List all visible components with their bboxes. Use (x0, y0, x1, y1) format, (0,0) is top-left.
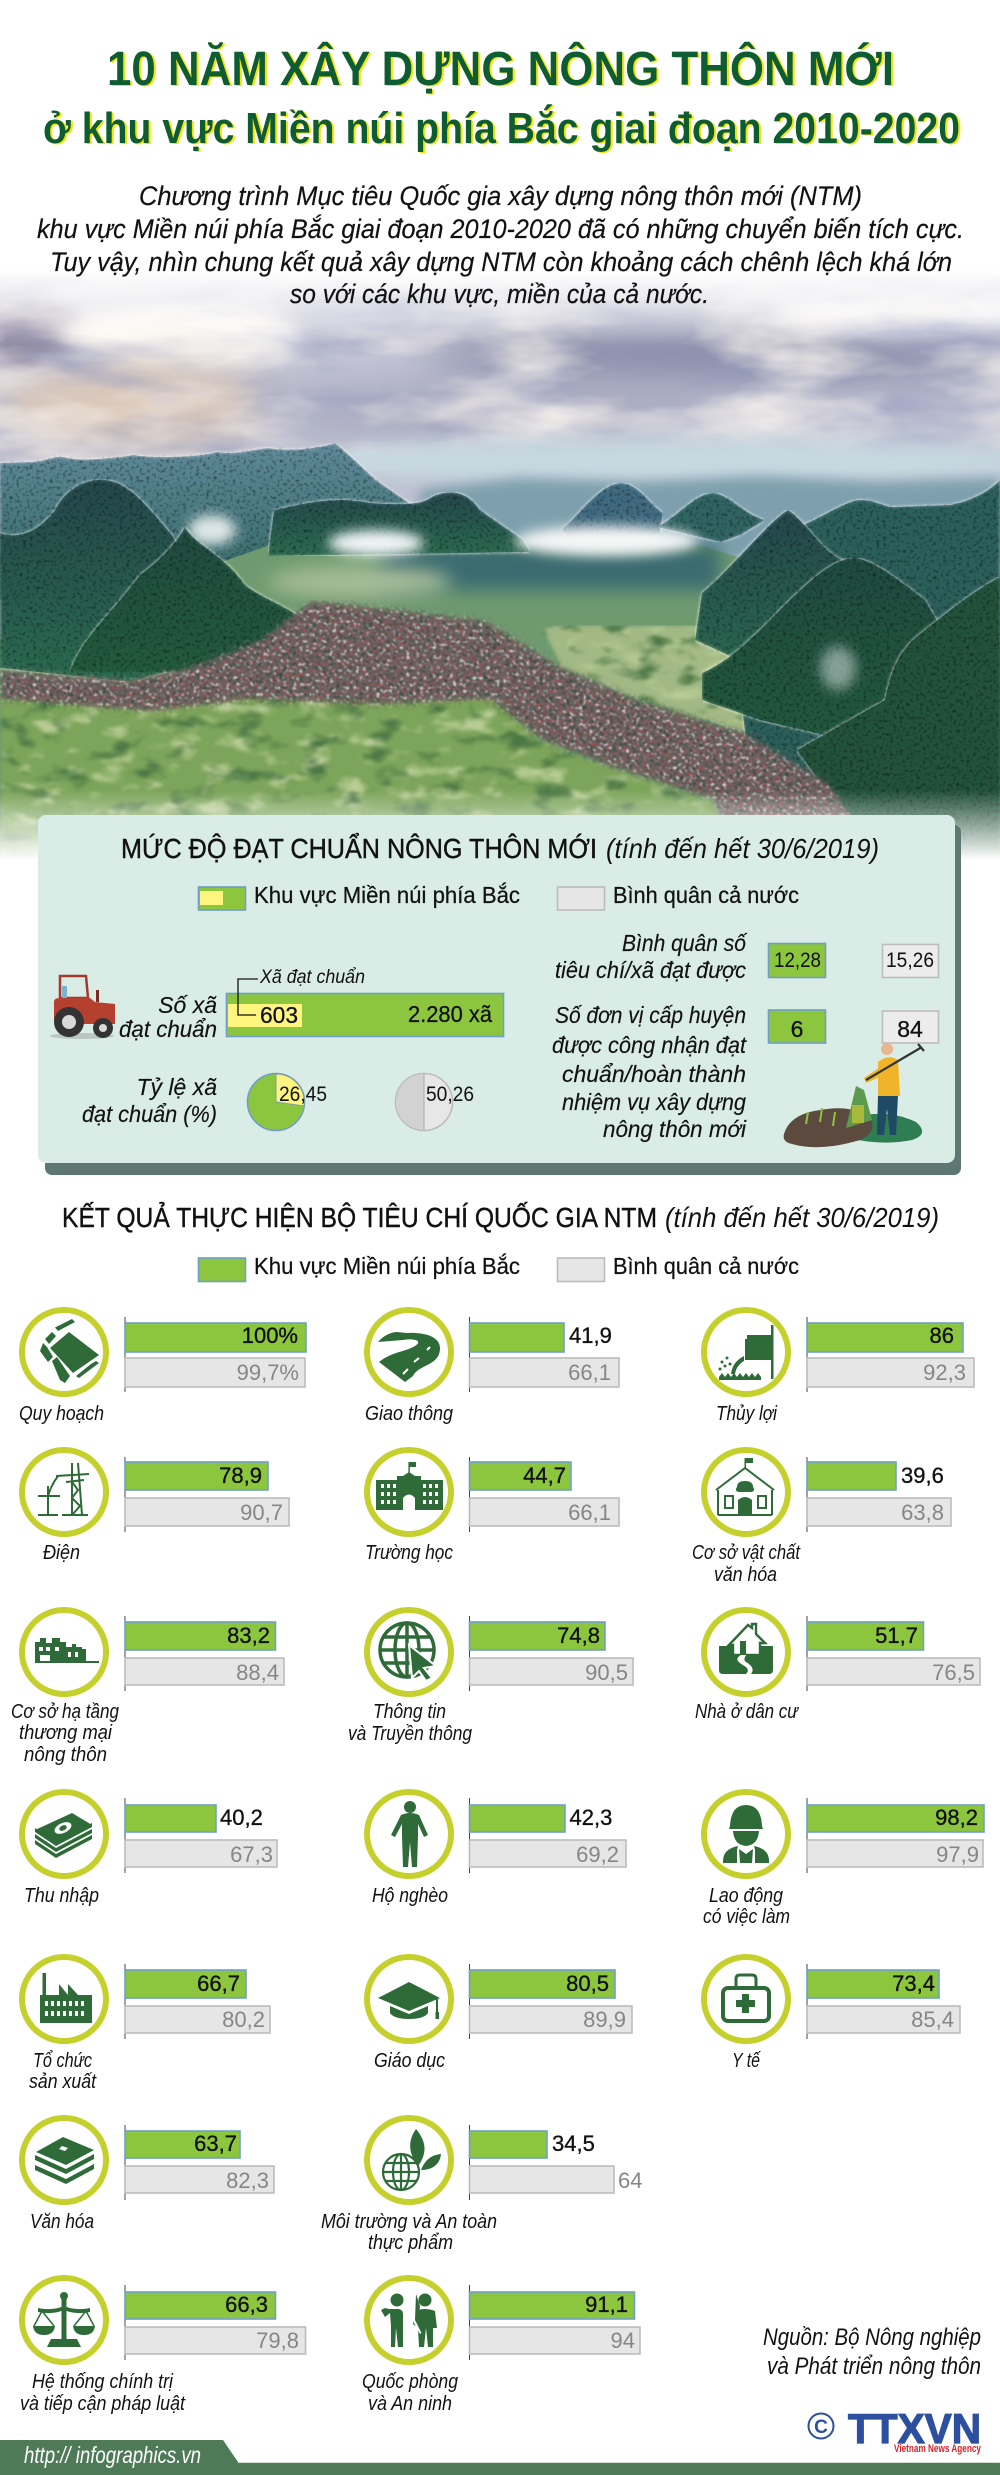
bars: 100% (242, 1323, 298, 1348)
bars: 63,7 (194, 2131, 237, 2156)
icon: tractor (50, 976, 115, 1039)
heading: criteria results: KẾT QUẢ THỰC HIỆN BỘ TIÊU CHÍ QUỐC GIA NTM (62, 1201, 657, 1233)
bars (470, 1798, 626, 1873)
bars: 69,2 (576, 1842, 619, 1867)
bars: 99,7% (237, 1360, 299, 1385)
stat: district units: nhiệm vụ xây dựng (562, 1089, 746, 1115)
bars: 78,9 (219, 1463, 262, 1488)
label: sản xuất (29, 2071, 97, 2093)
bars (125, 1457, 289, 1532)
bars: 66,1 (568, 1360, 611, 1385)
label (362, 2371, 458, 2415)
criterion: Thông tin và Truyền thông (348, 1610, 633, 1745)
criterion: Nhà ở dân cư (695, 1610, 980, 1723)
right back mountains (740, 480, 1000, 860)
icon: money stack (22, 1792, 106, 1876)
label: Quy hoạch (19, 1403, 104, 1425)
pie: northern mountains 26,45: 26,45 (279, 1083, 327, 1106)
intro text: so với các khu vực, miền của cả nước. (290, 279, 709, 309)
bars (125, 1616, 284, 1691)
heading: criteria results: (tính đến hết 30/6/2019) (665, 1202, 939, 1233)
bars (470, 1616, 633, 1691)
bars (470, 2125, 642, 2200)
criterion: Thu nhập (22, 1792, 277, 1907)
bars: 86 (930, 1323, 954, 1348)
label (348, 1701, 472, 1745)
bars: 88,4 (236, 1660, 279, 1685)
label: commune rate (82, 1074, 217, 1127)
criterion: Giáo dục (367, 1957, 632, 2072)
stat: district units: 84 (897, 1016, 923, 1042)
intro text (37, 181, 964, 309)
bars: 83,2 (227, 1623, 270, 1648)
icon: scales of justice (22, 2278, 106, 2362)
label (20, 2371, 186, 2415)
bars: 73,4 (892, 1971, 935, 1996)
bars (470, 2285, 640, 2360)
bars: 34,5 (552, 2131, 595, 2156)
bars: 98,2 (935, 1805, 978, 1830)
bars: 82,3 (226, 2168, 269, 2193)
bars (807, 1457, 951, 1532)
criterion: Cơ sở hạ tầng thương mại nông thôn (11, 1610, 284, 1766)
label: Cơ sở vật chất (692, 1542, 801, 1564)
bars (125, 1317, 306, 1392)
icon: planning map (22, 1310, 106, 1394)
bars: 66,3 (225, 2292, 268, 2317)
pie: national 50,26: 50,26 (426, 1083, 474, 1106)
bars: 90,5 (585, 1660, 628, 1685)
label: Thông tin (373, 1701, 446, 1723)
bars: 64 (618, 2168, 642, 2193)
label: number of communes: Số xã (158, 992, 217, 1018)
bars (470, 1964, 632, 2039)
label: commune rate: Tỷ lệ xã (136, 1074, 217, 1100)
bars (125, 2285, 306, 2360)
stat: district units (552, 1002, 938, 1142)
icon: factory (22, 1957, 106, 2041)
label: Hệ thống chính trị (32, 2371, 173, 2393)
bars (125, 2125, 274, 2200)
bars (807, 1616, 980, 1691)
bar: number of communes: 603 (260, 1002, 298, 1028)
label: và tiếp cận pháp luật (20, 2393, 186, 2415)
bars: 63,8 (901, 1500, 944, 1525)
stat: district units: được công nhận đạt (552, 1032, 748, 1058)
photo: mountain valley landscape (0, 220, 1000, 860)
label: thương mại (19, 1722, 113, 1744)
criterion: Điện (22, 1450, 289, 1564)
bars: 41,9 (569, 1323, 612, 1348)
stat: average criteria: Bình quân số (622, 930, 748, 956)
criterion: Thủy lợi (704, 1310, 974, 1425)
icon: books (22, 2118, 106, 2202)
label: Hộ nghèo (372, 1885, 448, 1907)
bars (807, 1317, 974, 1392)
intro text: Tuy vậy, nhìn chung kết quả xây dựng NTM còn khoảng cách chênh lệch khá lớn (50, 247, 952, 277)
label: Điện (43, 1542, 80, 1564)
criterion: Y tế (704, 1957, 960, 2072)
bars (125, 1964, 270, 2039)
label: Giao thông (365, 1403, 453, 1425)
criterion: Tổ chức sản xuất (22, 1957, 270, 2093)
stat: district units: Số đơn vị cấp huyện (555, 1002, 746, 1028)
bars (807, 1798, 984, 1873)
label: và An ninh (368, 2393, 452, 2415)
footer band with URL: http:// infographics.vn (24, 2442, 201, 2468)
fields (0, 695, 730, 860)
label (703, 1885, 790, 1928)
bars: 80,2 (222, 2007, 265, 2032)
bars: 74,8 (557, 1623, 600, 1648)
criterion: Cơ sở vật chất văn hóa (692, 1450, 951, 1586)
icon: cultural house (704, 1450, 788, 1534)
icon: power lines (22, 1450, 106, 1534)
icon: first aid kit (704, 1957, 788, 2041)
intro text: Chương trình Mục tiêu Quốc gia xây dựng nông thôn mới (NTM) (139, 181, 862, 211)
callout: standard communes: Xã đạt chuẩn (259, 967, 365, 988)
label (692, 1542, 801, 1586)
criterion: Giao thông (365, 1310, 619, 1425)
icon: irrigation (704, 1310, 788, 1394)
bars (470, 1457, 619, 1532)
stat: district units: 6 (791, 1016, 803, 1042)
pie: northern mountains 26,45 (248, 1074, 327, 1130)
stat: district units: nông thôn mới (603, 1116, 747, 1142)
bar: number of communes (226, 979, 504, 1036)
bars: 97,9 (936, 1842, 979, 1867)
bars: 79,8 (256, 2328, 299, 2353)
icon: graduation cap (367, 1957, 451, 2041)
label: Quốc phòng (362, 2371, 458, 2393)
label: nông thôn (24, 1744, 107, 1766)
label: văn hóa (714, 1564, 777, 1586)
criterion: Văn hóa (22, 2118, 274, 2233)
label (29, 2050, 97, 2093)
far haze hills (420, 476, 1000, 560)
icon: worker (704, 1792, 788, 1876)
label: Trường học (365, 1542, 453, 1564)
bars: 94 (611, 2328, 635, 2353)
bars: 76,5 (932, 1660, 975, 1685)
mid mountains (268, 492, 530, 556)
label: Nhà ở dân cư (695, 1701, 799, 1723)
mist (328, 530, 424, 556)
label (321, 2211, 497, 2254)
source note (763, 2324, 981, 2380)
panel heading: MỨC ĐỘ ĐẠT CHUẨN NÔNG THÔN MỚI (121, 833, 597, 864)
label: commune rate: đạt chuẩn (%) (82, 1101, 217, 1127)
bars: 39,6 (901, 1463, 944, 1488)
stat: average criteria (555, 930, 938, 983)
bars: 51,7 (875, 1623, 918, 1648)
bars: 80,5 (566, 1971, 609, 1996)
bars (807, 1964, 960, 2039)
legend: criteria results: Bình quân cả nước (613, 1253, 799, 1279)
icon: farmer with hoe (784, 1043, 924, 1147)
bars: 66,1 (568, 1500, 611, 1525)
bars: 92,3 (923, 1360, 966, 1385)
stat: district units: chuẩn/hoàn thành (562, 1061, 746, 1087)
criterion: Hệ thống chính trị và tiếp cận pháp luật (20, 2278, 306, 2415)
front mountains (0, 480, 205, 682)
legend: Khu vực Miền núi phía Bắc (254, 882, 520, 908)
label: Tổ chức (33, 2050, 92, 2072)
logo: TTXVN: C (814, 2417, 828, 2438)
footer band with URL (0, 2440, 1000, 2475)
legend (198, 882, 799, 910)
bars (125, 1798, 277, 1873)
legend: criteria results (198, 1253, 799, 1282)
legend: Bình quân cả nước (613, 882, 799, 908)
bar: number of communes: 2.280 xã (408, 1001, 492, 1027)
label: number of communes: đạt chuẩn (119, 1016, 217, 1042)
icon: globe and leaves (367, 2118, 451, 2202)
bars: 91,1 (585, 2292, 628, 2317)
label: có việc làm (703, 1906, 790, 1928)
label: Cơ sở hạ tầng (11, 1701, 119, 1723)
bars: 67,3 (230, 1842, 273, 1867)
label: number of communes (119, 992, 217, 1042)
title (43, 41, 960, 153)
icon: road (367, 1310, 451, 1394)
title: 10 NĂM XÂY DỰNG NÔNG THÔN MỚI (107, 41, 894, 96)
valley base (0, 545, 1000, 860)
bars: 85,4 (911, 2007, 954, 2032)
icon: globe with cursor (367, 1610, 451, 1694)
bars (470, 1317, 619, 1392)
bars: 44,7 (523, 1463, 566, 1488)
icon: person (367, 1792, 451, 1876)
village (0, 600, 861, 830)
criterion: Lao động có việc làm (703, 1792, 984, 1928)
stat: average criteria: 12,28 (774, 949, 821, 972)
bars: 40,2 (220, 1805, 263, 1830)
icon: soldiers (367, 2278, 451, 2362)
criterion: Hộ nghèo (367, 1792, 626, 1907)
stat: average criteria: tiêu chí/xã đạt được (555, 957, 746, 983)
icon: house with road (704, 1610, 788, 1694)
label: Giáo dục (374, 2050, 445, 2072)
panel: achievement level (38, 815, 961, 1175)
back ridge (0, 443, 440, 600)
criterion: Trường học (365, 1450, 619, 1564)
label: thực phẩm (368, 2232, 453, 2254)
label: và Truyền thông (348, 1723, 472, 1745)
icon: commercial buildings (22, 1610, 106, 1694)
criterion: Môi trường và An toàn thực phẩm (321, 2118, 642, 2254)
logo: TTXVN: TTXVN (848, 2405, 981, 2452)
bars: 90,7 (240, 1500, 283, 1525)
icon: school (367, 1450, 451, 1534)
label: Môi trường và An toàn (321, 2211, 497, 2233)
bars: 66,7 (197, 1971, 240, 1996)
label: Văn hóa (30, 2211, 94, 2233)
bars: 89,9 (583, 2007, 626, 2032)
bars: 42,3 (570, 1805, 612, 1830)
criterion: Quốc phòng và An ninh (362, 2278, 640, 2415)
label: Thu nhập (24, 1885, 99, 1907)
label: Lao động (709, 1885, 783, 1907)
label: Y tế (732, 2050, 761, 2072)
label: Thủy lợi (716, 1403, 777, 1425)
stat: average criteria: 15,26 (886, 949, 934, 972)
criterion: Quy hoạch (19, 1310, 306, 1425)
pie: national 50,26 (396, 1074, 474, 1130)
legend: criteria results: Khu vực Miền núi phía Bắc (254, 1253, 520, 1279)
label (11, 1701, 119, 1766)
panel heading: (tính đến hết 30/6/2019) (606, 833, 879, 864)
